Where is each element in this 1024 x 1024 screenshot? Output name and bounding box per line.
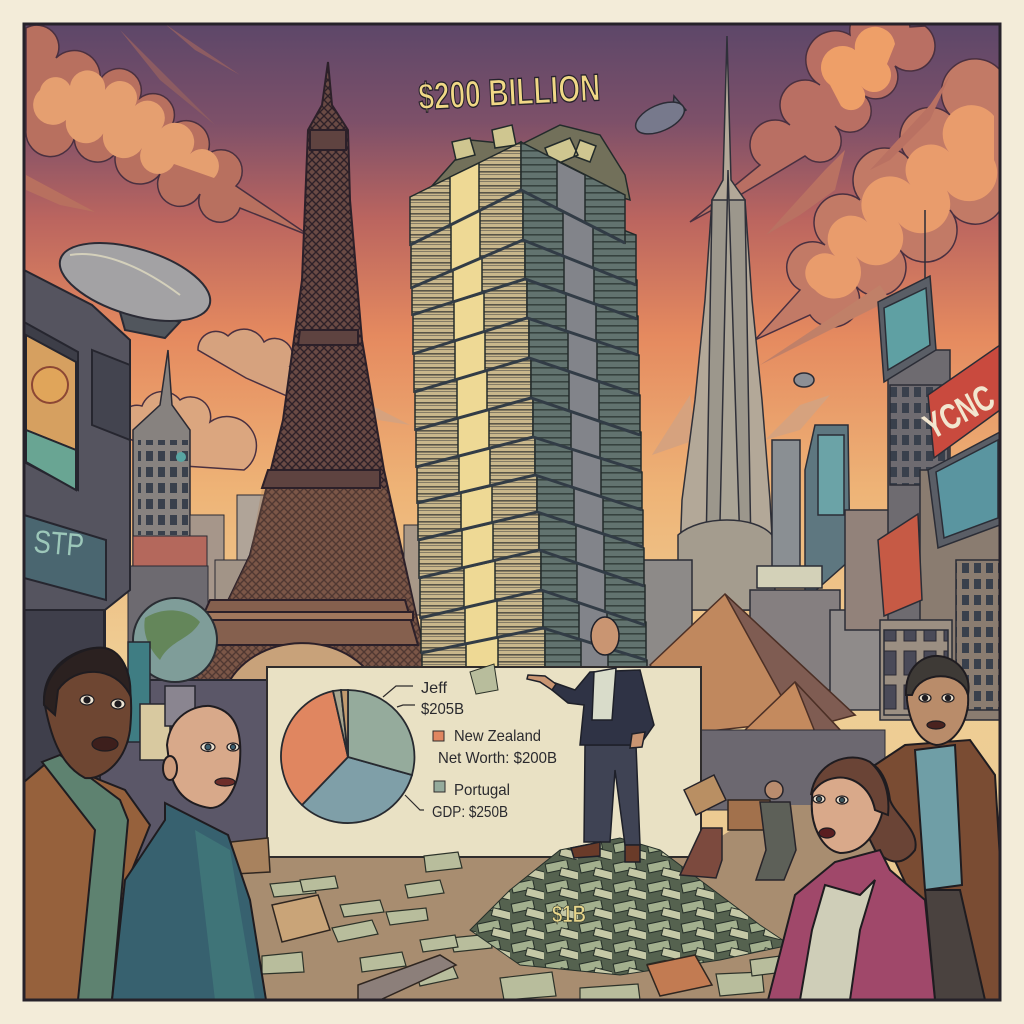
panel: pie chart board xyxy=(267,667,701,857)
stacks, bottom to top xyxy=(422,628,647,668)
globe xyxy=(133,598,217,682)
pie legend: GDP: $250B xyxy=(432,804,508,821)
skyline left xyxy=(128,350,424,696)
background walkers xyxy=(680,775,796,880)
bald man's face details xyxy=(201,742,239,786)
lower right street buildings xyxy=(700,730,885,810)
person: bald man xyxy=(112,706,266,1000)
pie chart xyxy=(281,690,414,823)
pie legend: Net Worth: $200B xyxy=(438,750,557,767)
crates and debris xyxy=(231,800,770,1000)
person: man, left xyxy=(24,648,150,1000)
pile label: $1B xyxy=(552,901,586,928)
pie legend: Portugal xyxy=(454,782,510,799)
small flying craft xyxy=(631,96,814,387)
title: $200 BILLION xyxy=(417,67,601,119)
pie legend xyxy=(383,680,557,821)
pie legend: New Zealand xyxy=(454,728,541,745)
street signs and shopfronts xyxy=(128,642,195,760)
money pile xyxy=(470,838,790,975)
pyramids xyxy=(650,594,855,732)
neon sign: YCNC xyxy=(917,376,1001,447)
loose notes on ground xyxy=(262,852,784,1000)
person: woman xyxy=(768,757,935,1000)
left man's face details xyxy=(80,695,125,751)
presenter: Jeff xyxy=(527,617,654,862)
ground xyxy=(225,805,900,1000)
skyline right xyxy=(642,210,1000,720)
Eiffel tower xyxy=(185,62,424,690)
airship xyxy=(51,228,219,338)
clouds xyxy=(26,1,1004,470)
left buildings xyxy=(24,270,280,860)
right man's face details xyxy=(919,694,954,729)
storefront sign: STP xyxy=(32,523,85,563)
pie legend: $205B xyxy=(421,701,464,718)
pie legend: Jeff xyxy=(421,680,448,697)
money tower xyxy=(410,125,647,668)
woman's face details xyxy=(813,795,848,838)
Burj tower xyxy=(678,36,776,610)
person: man, right xyxy=(875,656,1000,1000)
loose notes on top xyxy=(415,125,630,205)
falling bill xyxy=(470,664,498,694)
